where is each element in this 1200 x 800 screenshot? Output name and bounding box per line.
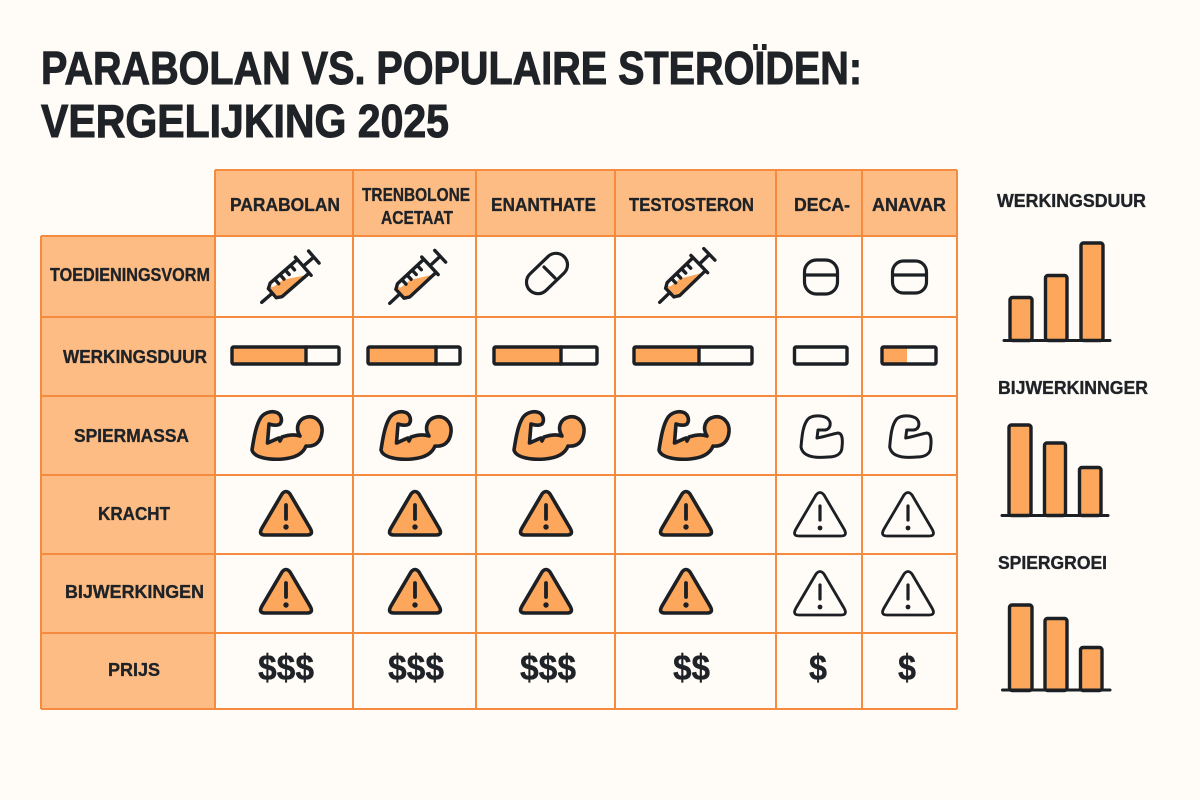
icon: filled muscle xyxy=(659,412,729,459)
icon: filled warning xyxy=(390,570,440,613)
icon: filled warning xyxy=(390,492,440,535)
row headers: PRIJS xyxy=(108,660,160,680)
icon: filled muscle xyxy=(381,412,451,459)
column headers: TESTOSTERON xyxy=(629,195,754,215)
row headers: WERKINGSDUUR xyxy=(63,347,207,367)
row: prijs: $ xyxy=(898,647,916,688)
icon: syringe xyxy=(651,246,718,311)
column headers xyxy=(230,185,946,228)
icon: filled muscle xyxy=(252,412,322,459)
row headers: BIJWERKINGEN xyxy=(65,582,204,602)
comparison table xyxy=(41,170,957,709)
row: toedieningsvorm icons xyxy=(254,246,926,312)
column headers: ANAVAR xyxy=(872,195,946,215)
icon: filled warning xyxy=(661,492,711,535)
column headers: DECA- xyxy=(794,195,850,215)
row: bijwerkingen icons xyxy=(261,570,933,615)
icon: syringe xyxy=(254,248,322,311)
row: prijs xyxy=(258,647,916,688)
icon: outline warning xyxy=(883,492,933,536)
row header band xyxy=(41,236,215,709)
duration bar trenbolone xyxy=(368,347,460,364)
row: prijs: $$$ xyxy=(258,647,314,688)
icon: filled warning xyxy=(261,492,311,535)
chart: spiergroei xyxy=(998,553,1110,690)
column headers: PARABOLAN xyxy=(230,195,340,215)
icon: syringe xyxy=(382,247,448,312)
row headers: TOEDIENINGSVORM xyxy=(50,265,210,285)
column headers: TRENBOLONE xyxy=(362,185,470,205)
icon: capsule xyxy=(522,249,572,298)
duration bar anavar xyxy=(882,347,936,364)
icon: outline warning xyxy=(795,572,845,615)
duration bar enanthate xyxy=(494,347,597,364)
row: prijs: $$$ xyxy=(520,647,576,688)
icon: filled warning xyxy=(661,570,711,613)
duration bar deca xyxy=(794,347,847,364)
icon: outline muscle xyxy=(801,416,842,457)
row: prijs: $$ xyxy=(673,647,710,688)
icon: outline warning xyxy=(883,572,933,615)
chart bars xyxy=(1002,425,1108,516)
chart heading: BIJWERKINNGER xyxy=(998,378,1148,398)
table header band xyxy=(215,170,957,236)
row headers: SPIERMASSA xyxy=(74,426,189,446)
row: spiermassa icons xyxy=(252,412,931,459)
row headers: KRACHT xyxy=(98,504,170,524)
icon: tablet xyxy=(892,261,926,293)
icon: outline muscle xyxy=(890,416,931,457)
chart bars xyxy=(1004,243,1110,340)
chart heading: SPIERGROEI xyxy=(998,553,1107,573)
duration bar parabolan xyxy=(232,347,339,364)
row: prijs: $$$ xyxy=(388,647,444,688)
icon: filled warning xyxy=(521,570,571,613)
row: prijs: $ xyxy=(809,647,827,688)
icon: tablet xyxy=(804,260,838,294)
icon: filled warning xyxy=(261,570,311,613)
row: kracht icons xyxy=(261,492,933,536)
chart: bijwerkingen xyxy=(998,378,1148,516)
chart: werkingsduur xyxy=(997,191,1146,340)
column headers: ENANTHATE xyxy=(491,195,596,215)
title: VERGELIJKING 2025 xyxy=(41,95,449,147)
chart heading: WERKINGSDUUR xyxy=(997,191,1146,211)
duration bar testosteron xyxy=(634,347,752,364)
row headers xyxy=(50,265,210,680)
title xyxy=(41,42,862,147)
icon: outline warning xyxy=(795,492,845,536)
icon: filled muscle xyxy=(514,412,584,459)
icon: filled warning xyxy=(521,492,571,535)
row: werkingsduur bars xyxy=(232,347,936,364)
column headers: ACETAAT xyxy=(381,208,453,228)
chart bars xyxy=(1002,605,1110,690)
title: PARABOLAN VS. POPULAIRE STEROÏDEN: xyxy=(41,42,862,94)
